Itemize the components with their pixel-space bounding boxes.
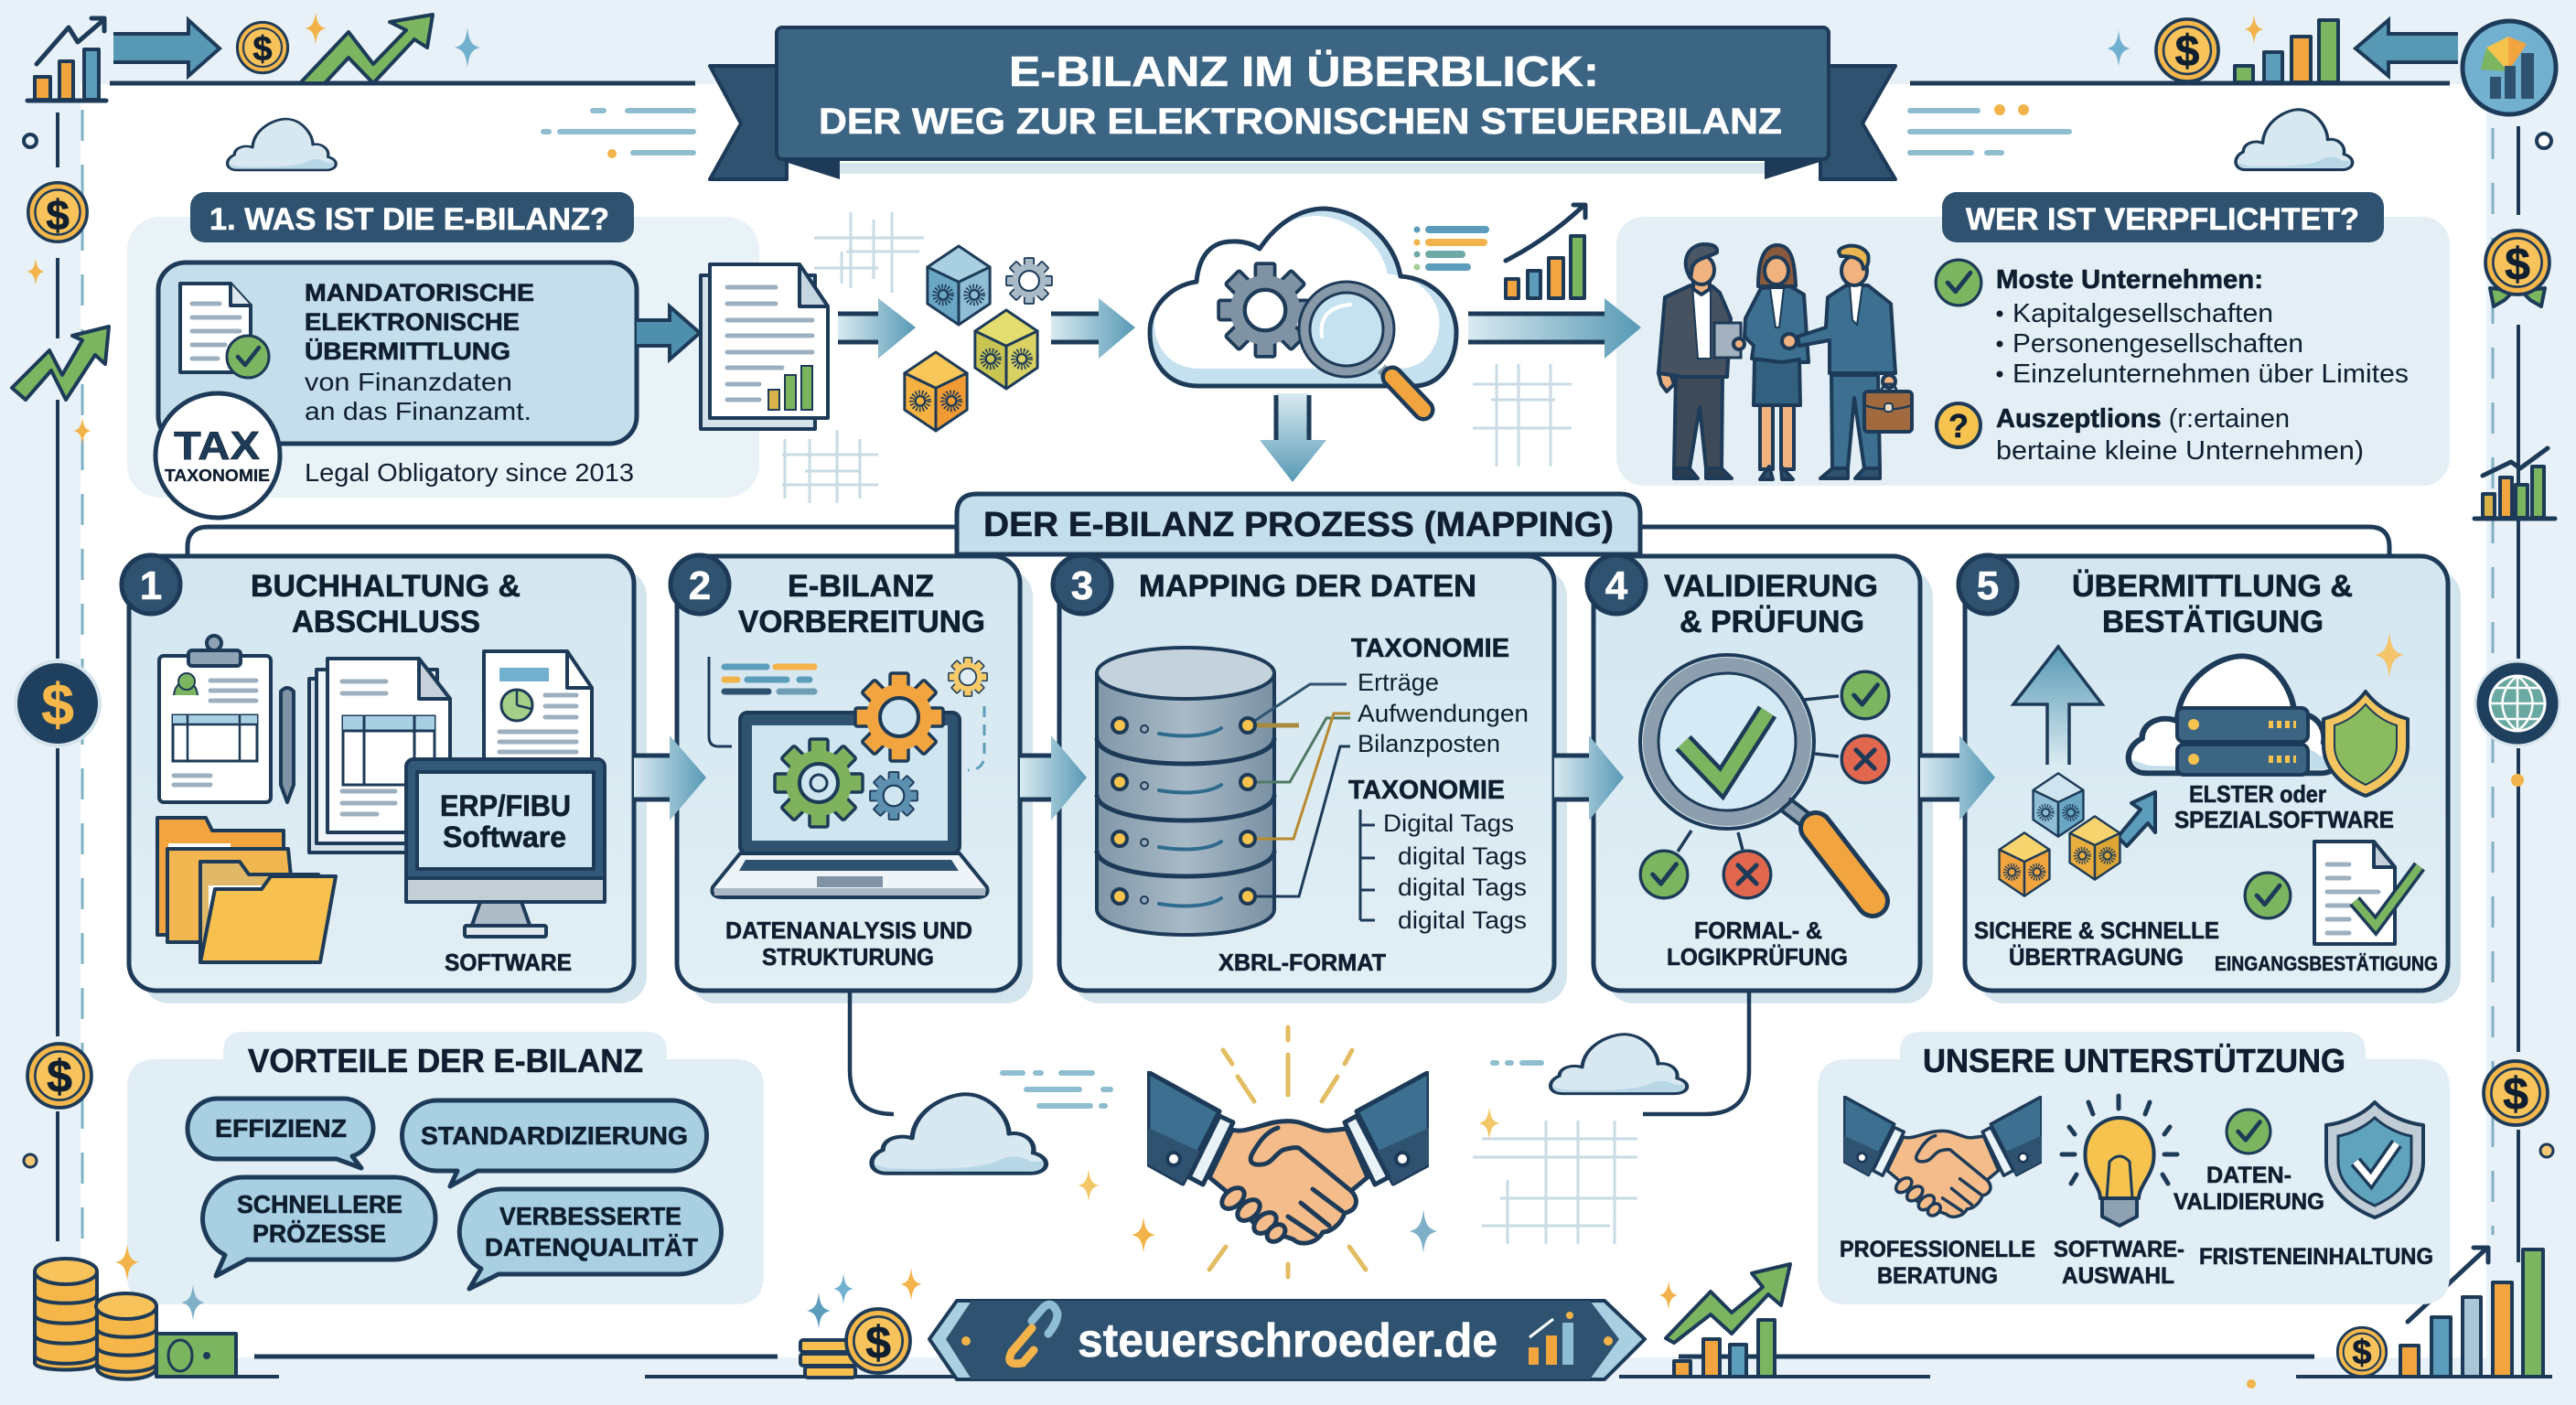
icon: link bbox=[1010, 1304, 1057, 1364]
icon: laptop with gears bbox=[712, 673, 988, 897]
illustration: three business people bbox=[1658, 244, 1912, 479]
heading: BUCHHALTUNG & bbox=[251, 569, 521, 604]
caption: elster: ELSTER oder bbox=[2189, 780, 2326, 808]
caption: uebertragung: SICHERE & SCHNELLE bbox=[1974, 917, 2219, 944]
icon: top-right coin, chart, sparkle bbox=[2107, 15, 2338, 82]
icon and label: daten-validierung: DATEN- bbox=[2206, 1163, 2292, 1188]
icon: clipboard bbox=[159, 636, 271, 802]
list: moste unternehmen bbox=[1936, 260, 2409, 389]
icon: right rail ring and medal: $ bbox=[2505, 239, 2530, 290]
icon and label: daten-validierung bbox=[2174, 1110, 2324, 1215]
title line 2: DER WEG ZUR ELEKTRONISCHEN STEUERBILANZ bbox=[819, 102, 1782, 142]
taxonomy list 2: TAXONOMIE bbox=[1348, 776, 1505, 805]
icon: top-left bar chart with arrow bbox=[27, 18, 106, 101]
definition box bbox=[158, 263, 637, 444]
bubble: standardisierung: STANDARDIZIERUNG bbox=[421, 1121, 688, 1150]
panel: unsere unterstuetzung bbox=[1818, 1032, 2450, 1304]
text: website: steuerschroeder.de bbox=[1078, 1314, 1497, 1367]
icon: mini bars bbox=[1529, 1312, 1573, 1365]
label: software-auswahl bbox=[2054, 1237, 2184, 1289]
icon: coin beside web banner bbox=[800, 1268, 922, 1378]
icon: receipt document with check bbox=[2245, 842, 2420, 944]
icon: light bulb bbox=[2062, 1096, 2177, 1226]
icon: coin top-left bbox=[237, 22, 288, 73]
panel: wer ist verpflichtet bbox=[1616, 192, 2450, 486]
heading pill: wer ist verpflichtet: WER IST VERPFLICHTET? bbox=[1966, 202, 2359, 237]
label: professionelle beratung: BERATUNG bbox=[1877, 1263, 1998, 1289]
icon: bottom-right chart and coin bbox=[2247, 1248, 2543, 1389]
card 5: uebermittlung bbox=[1959, 555, 2461, 1003]
card 4: validierung bbox=[1587, 555, 1933, 1003]
icon: magnifier with check bbox=[1640, 655, 1889, 901]
list: moste unternehmen: Personengesellschaften bbox=[2012, 329, 2303, 359]
icon: sparkle bbox=[2375, 632, 2404, 678]
label: professionelle beratung: PROFESSIONELLE bbox=[1840, 1237, 2035, 1262]
icon: code lines bbox=[709, 657, 987, 770]
step number 1: 1 bbox=[140, 563, 162, 608]
icon: right rail lower coin and dots: $ bbox=[2503, 1068, 2528, 1120]
heading bbox=[251, 569, 521, 639]
taxonomy list 2: digital Tags bbox=[1398, 842, 1527, 870]
arrow: step 2 to 3 bbox=[1020, 735, 1087, 820]
caption: FORMAL- & bbox=[1694, 917, 1822, 944]
card 2: vorbereitung bbox=[671, 555, 1033, 1003]
arrow: step 1 to 2 bbox=[634, 735, 706, 820]
step number 2 bbox=[671, 555, 729, 614]
icon: sparkles top-left bbox=[305, 12, 480, 68]
badge: tax taxonomie: TAXONOMIE bbox=[165, 467, 270, 485]
heading: VORBEREITUNG bbox=[738, 605, 985, 639]
panel: vorteile bbox=[127, 1032, 764, 1304]
taxonomy list 1: Aufwendungen bbox=[1358, 700, 1529, 727]
taxonomy list 1: TAXONOMIE bbox=[1351, 634, 1509, 663]
process heading tab bbox=[188, 494, 2389, 554]
heading: UNSERE UNTERSTÜTZUNG bbox=[1923, 1042, 2345, 1079]
arrow: step 3 to 4 bbox=[1554, 735, 1624, 820]
icon: chart document bbox=[484, 651, 592, 773]
heading: E-BILANZ bbox=[788, 569, 934, 604]
icon: right rail small chart bbox=[2474, 448, 2555, 519]
heading pill: wer ist verpflichtet bbox=[1942, 192, 2384, 242]
bubble: standardisierung bbox=[402, 1100, 706, 1186]
icon: coin top-left: $ bbox=[252, 30, 273, 69]
list: exceptions bbox=[1937, 403, 2364, 466]
heading bbox=[738, 569, 985, 639]
icon: coin stacks and banknote bbox=[35, 1244, 236, 1379]
icon: folders bbox=[157, 818, 336, 962]
icon: cloud with gear and magnifier bbox=[1150, 209, 1456, 410]
heading pill: was ist die e-bilanz: 1. WAS IST DIE E-BILANZ? bbox=[209, 202, 609, 237]
caption: eingangsbestaetigung: EINGANGSBESTÄTIGUNG bbox=[2215, 952, 2438, 975]
icon: top-right pie and chart badge bbox=[2463, 21, 2556, 114]
taxonomy list 1: Erträge bbox=[1358, 669, 1439, 696]
caption bbox=[1667, 917, 1848, 971]
icon: document with check bbox=[180, 284, 269, 378]
step number 2: 2 bbox=[689, 563, 711, 608]
arrow: step 4 to 5 bbox=[1920, 735, 1995, 820]
heading bbox=[2072, 569, 2353, 639]
icon: left rail ring, coin, star: $ bbox=[46, 191, 70, 239]
taxonomy list 2: digital Tags bbox=[1398, 874, 1527, 901]
label: software-auswahl: AUSWAHL bbox=[2062, 1263, 2174, 1289]
step number 4 bbox=[1587, 555, 1646, 614]
taxonomy list 2: digital Tags bbox=[1398, 906, 1527, 934]
arrow: cloud to people bbox=[1468, 298, 1641, 359]
icon: globe right bbox=[2475, 661, 2560, 745]
icon: left rail lower coin and ring: $ bbox=[47, 1051, 72, 1102]
title banner bbox=[710, 27, 1895, 179]
icon: coin beside web banner: $ bbox=[865, 1317, 891, 1368]
heading: VALIDIERUNG bbox=[1664, 569, 1878, 604]
list: exceptions: Auszeptlions (r:ertainen bbox=[1996, 404, 2290, 434]
icon: clouds and sparkles near handshake bbox=[872, 1035, 1687, 1253]
bubble: effizienz: EFFIZIENZ bbox=[215, 1114, 347, 1142]
bubble: schnellere prozesse: SCHNELLERE bbox=[237, 1190, 402, 1218]
step number 5 bbox=[1959, 555, 2017, 614]
icon: transfer cubes bbox=[2000, 773, 2155, 896]
icon: green growth arrow top bbox=[300, 15, 433, 83]
title line 1: E-BILANZ IM ÜBERBLICK: bbox=[1009, 48, 1599, 95]
text: definition: MANDATORISCHE bbox=[305, 279, 534, 306]
arrow: box to document bbox=[637, 306, 700, 359]
text: definition: an das Finanzamt. bbox=[305, 397, 531, 425]
icon: monitor bbox=[406, 759, 605, 937]
taxonomy list 1 bbox=[1351, 634, 1529, 757]
caption: elster: SPEZIALSOFTWARE bbox=[2174, 806, 2394, 833]
bubble: effizienz bbox=[188, 1099, 373, 1168]
arrow: cloud down to process bbox=[1260, 393, 1326, 482]
text: definition: ÜBERMITTLUNG bbox=[305, 338, 510, 365]
taxonomy list 2: Digital Tags bbox=[1383, 810, 1514, 837]
heading pill: was ist die e-bilanz bbox=[190, 192, 634, 242]
icon: mini chart and list bbox=[1414, 205, 1585, 298]
arrow: cubes to cloud bbox=[1051, 298, 1135, 359]
bubble: verbesserte datenqualitaet: VERBESSERTE bbox=[499, 1202, 682, 1230]
heading: MAPPING DER DATEN bbox=[1139, 569, 1476, 604]
heading: VORTEILE DER E-BILANZ bbox=[248, 1042, 643, 1079]
icon: right rail lower coin and dots bbox=[2484, 774, 2553, 1157]
caption bbox=[725, 917, 972, 971]
caption: STRUKTURUNG bbox=[762, 943, 934, 971]
icon: right rail ring and medal bbox=[2485, 134, 2551, 306]
icon: top-right coin, chart, sparkle: $ bbox=[2175, 27, 2200, 76]
bubble: verbesserte datenqualitaet bbox=[459, 1189, 721, 1289]
person: man with tablet bbox=[1658, 244, 1744, 478]
icon: monitor: ERP/FIBU bbox=[440, 789, 571, 822]
label: professionelle beratung bbox=[1840, 1237, 2035, 1289]
person: woman in suit bbox=[1744, 245, 1809, 479]
caption: uebertragung bbox=[1974, 917, 2219, 971]
label: software-auswahl: SOFTWARE- bbox=[2054, 1237, 2184, 1262]
icon: data cubes bbox=[905, 246, 1052, 431]
decorative grids bbox=[782, 212, 1637, 1244]
list: moste unternehmen: Moste Unternehmen: bbox=[1996, 265, 2263, 295]
caption: XBRL-FORMAT bbox=[1218, 949, 1386, 976]
icon: pen bbox=[281, 688, 294, 802]
person: man with briefcase bbox=[1782, 246, 1912, 478]
icon: cloud with servers bbox=[2129, 656, 2339, 775]
icon: left rail green arrow bbox=[12, 327, 109, 400]
step number 1 bbox=[122, 555, 180, 614]
step number 5: 5 bbox=[1977, 563, 1999, 608]
icon: left rail lower coin and ring bbox=[24, 417, 91, 1167]
heading: ABSCHLUSS bbox=[292, 605, 480, 639]
icon: monitor: Software bbox=[443, 820, 566, 853]
connectors under process bbox=[850, 991, 1749, 1114]
list: moste unternehmen: Kapitalgesellschaften bbox=[2012, 299, 2273, 328]
web address banner bbox=[929, 1301, 1645, 1379]
icon: big dollar circle left: $ bbox=[41, 671, 74, 737]
icon: document stack bbox=[309, 659, 450, 853]
heading: & PRÜFUNG bbox=[1680, 605, 1864, 639]
heading: BESTÄTIGUNG bbox=[2102, 605, 2324, 639]
caption: LOGIKPRÜFUNG bbox=[1667, 943, 1848, 971]
badge: tax taxonomie: TAX bbox=[174, 424, 260, 468]
caption: DATENANALYSIS UND bbox=[725, 917, 972, 944]
icon and label: daten-validierung: VALIDIERUNG bbox=[2174, 1189, 2324, 1215]
card 1: buchhaltung bbox=[122, 555, 647, 1003]
icon: big dollar circle left bbox=[16, 661, 100, 745]
arrow: upward transfer bbox=[2013, 647, 2102, 765]
list: exceptions: ? bbox=[1948, 407, 1969, 445]
icon: clouds and speed lines top bbox=[228, 104, 2353, 170]
text: definition: von Finanzdaten bbox=[305, 368, 512, 396]
step number 4: 4 bbox=[1605, 563, 1628, 608]
arrow: document to cubes bbox=[838, 298, 916, 359]
icon: bottom-right chart and coin: $ bbox=[2352, 1334, 2372, 1372]
card 3: mapping bbox=[1053, 555, 1567, 1003]
icon: report document bbox=[701, 264, 828, 429]
heading: ÜBERMITTLUNG & bbox=[2072, 569, 2353, 604]
arrow: top-right pointing left bbox=[2356, 20, 2458, 76]
caption: uebertragung: ÜBERTRAGUNG bbox=[2009, 943, 2184, 971]
heading bbox=[1664, 569, 1878, 639]
taxonomy list 2 bbox=[1348, 776, 1527, 934]
icon: small handshake bbox=[1844, 1097, 2042, 1218]
illustration: big handshake bbox=[1148, 1027, 1429, 1277]
step number 3: 3 bbox=[1071, 563, 1093, 608]
icon: database cylinder bbox=[1097, 648, 1350, 935]
label: fristeneinhaltung: FRISTENEINHALTUNG bbox=[2199, 1244, 2433, 1270]
arrow: top-left bbox=[113, 20, 220, 76]
bubble: schnellere prozesse bbox=[203, 1177, 435, 1276]
bubble: verbesserte datenqualitaet: DATENQUALITÄT bbox=[485, 1233, 698, 1261]
text: definition bbox=[305, 279, 534, 425]
step number 3 bbox=[1053, 555, 1111, 614]
bubble: schnellere prozesse: PRÖZESSE bbox=[252, 1219, 386, 1248]
icon: shield with check bbox=[2326, 1102, 2423, 1217]
process heading tab: DER E-BILANZ PROZESS (MAPPING) bbox=[983, 506, 1614, 544]
list: moste unternehmen: Einzelunternehmen über Limites bbox=[2012, 359, 2409, 389]
icon: left rail ring, coin, star bbox=[24, 134, 87, 285]
icon: security shield bbox=[2324, 692, 2408, 796]
caption: elster bbox=[2174, 780, 2394, 833]
label: software: SOFTWARE bbox=[445, 949, 572, 976]
taxonomy list 1: Bilanzposten bbox=[1358, 730, 1500, 757]
badge: tax taxonomie bbox=[156, 393, 280, 518]
text: legal obligatory: Legal Obligatory since 2013 bbox=[305, 458, 634, 487]
list: exceptions: bertaine kleine Unternehmen) bbox=[1996, 436, 2364, 466]
panel: was ist die e-bilanz bbox=[127, 192, 759, 518]
icon: bottom chart with green arrow bbox=[1659, 1264, 1790, 1377]
text: definition: ELEKTRONISCHE bbox=[305, 308, 520, 336]
